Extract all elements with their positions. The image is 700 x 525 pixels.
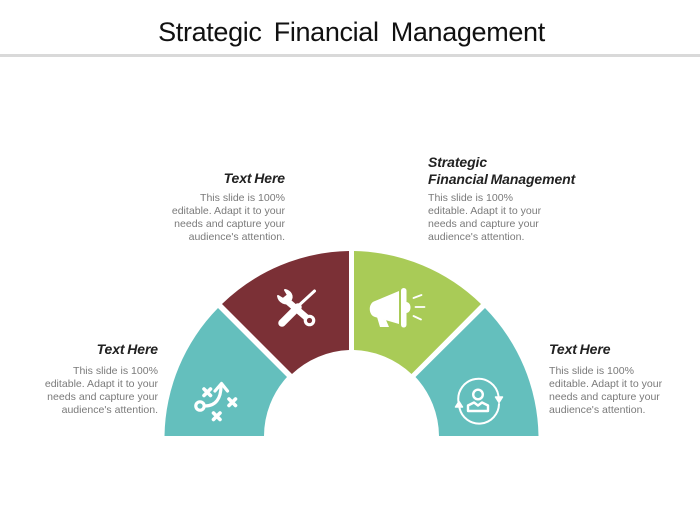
text block: top right: needs and capture your xyxy=(428,218,539,230)
text block: right: Text Here xyxy=(549,341,611,357)
icon: megaphone xyxy=(370,288,424,328)
text block: top right: Strategic xyxy=(428,154,487,170)
text block: top left: editable. Adapt it to your xyxy=(172,205,285,217)
text block: top right: editable. Adapt it to your xyxy=(428,205,542,217)
segment: right teal xyxy=(416,308,538,436)
text block: top right xyxy=(428,154,577,243)
icon: strategy play xyxy=(196,384,236,420)
text block: left: needs and capture your xyxy=(47,391,158,403)
icon: wrench and screwdriver xyxy=(278,290,314,325)
text block: left xyxy=(45,341,158,416)
text block: top left xyxy=(172,170,285,243)
text block: top left: audience's attention. xyxy=(189,231,285,243)
segment: maroon xyxy=(222,251,349,374)
text block: right: This slide is 100% xyxy=(549,365,634,377)
text block: right: needs and capture your xyxy=(549,391,660,403)
text block: right: editable. Adapt it to your xyxy=(549,378,663,390)
text block: top right: This slide is 100% xyxy=(428,192,513,204)
text block: top right: Financial Management xyxy=(428,171,577,187)
text block: left: This slide is 100% xyxy=(73,365,158,377)
segment: green xyxy=(354,251,481,374)
text block: top left: needs and capture your xyxy=(174,218,285,230)
icon: person in cycle xyxy=(456,379,502,424)
text block: right: audience's attention. xyxy=(549,404,645,416)
text block: right xyxy=(549,341,663,416)
segment: left teal xyxy=(164,308,287,436)
text block: top left: This slide is 100% xyxy=(200,192,285,204)
text block: left: audience's attention. xyxy=(62,404,158,416)
text block: left: Text Here xyxy=(97,341,158,357)
text block: top left: Text Here xyxy=(224,170,285,186)
text block: left: editable. Adapt it to your xyxy=(45,378,158,390)
title divider xyxy=(0,54,700,57)
text block: top right: audience's attention. xyxy=(428,231,524,243)
title: Strategic Financial Management xyxy=(158,17,546,47)
